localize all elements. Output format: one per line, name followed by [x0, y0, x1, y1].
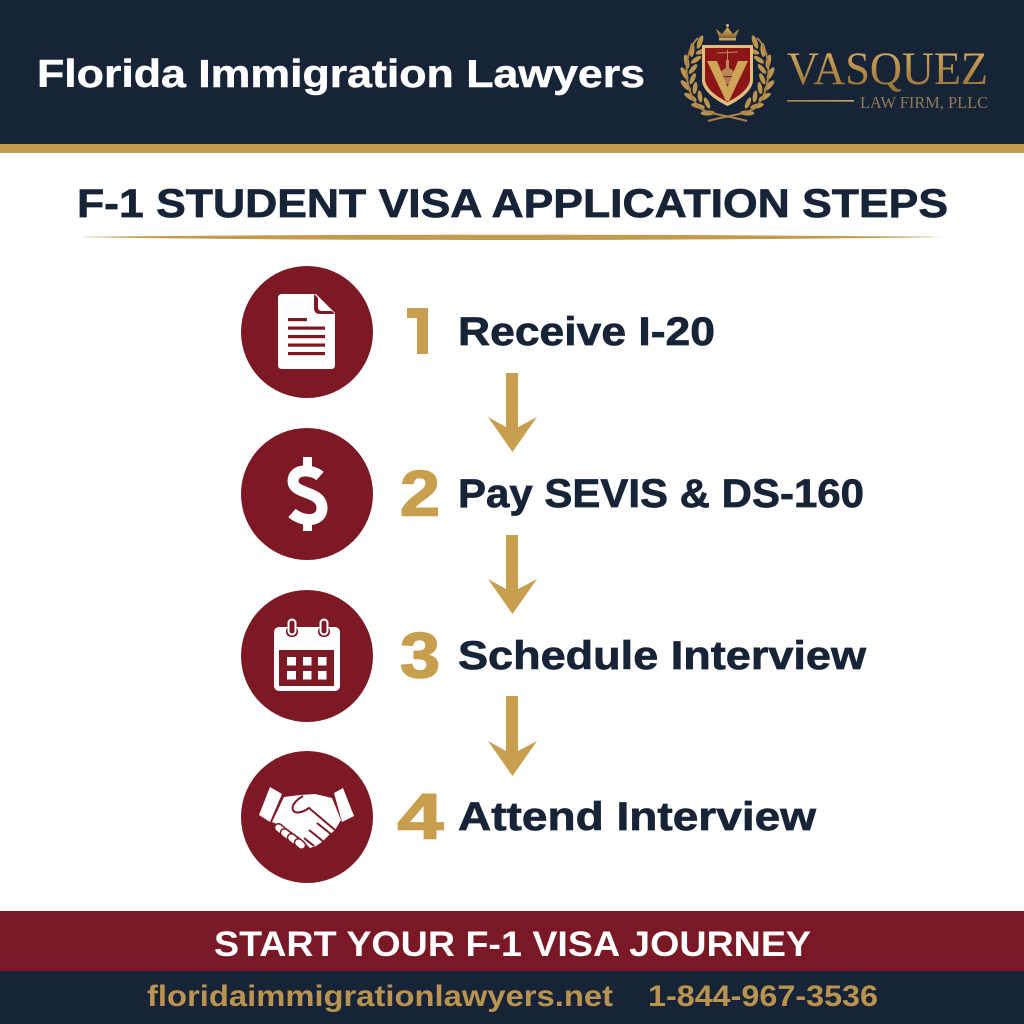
logo: Vasquez Law Firm [679, 24, 988, 121]
step label 3: Schedule Interview [458, 634, 867, 678]
arrow 2 to 3 [488, 535, 537, 614]
step 3 [241, 590, 867, 722]
icon: calendar [241, 590, 373, 722]
step number 3: 3 [400, 620, 440, 692]
footer band [0, 971, 1024, 1024]
call to action text: START YOUR F-1 VISA JOURNEY [214, 925, 811, 964]
icon: dollar sign [241, 428, 373, 560]
heading underline [80, 235, 942, 240]
logo subtitle: LAW FIRM, PLLC [860, 93, 988, 112]
step number 2: 2 [400, 458, 440, 530]
step number 4: 4 [398, 780, 444, 852]
step number 1: 1 [400, 296, 438, 368]
step 1 [241, 266, 715, 398]
icon: document [241, 266, 373, 398]
step label 1: Receive I-20 [458, 310, 715, 354]
step label 2: Pay SEVIS & DS-160 [458, 472, 864, 516]
logo wordmark: VASQUEZ [787, 43, 988, 95]
icon: laurel wreath [679, 35, 776, 121]
arrow 1 to 2 [488, 373, 537, 452]
step number 1 [407, 308, 428, 354]
arrow 3 to 4 [488, 696, 537, 776]
icon: handshake [241, 751, 373, 883]
step 2 [241, 428, 864, 560]
step label 4: Attend Interview [458, 795, 817, 839]
header band [0, 0, 1024, 153]
call to action band [0, 911, 1024, 971]
header title: Florida Immigration Lawyers [37, 53, 645, 96]
phone number: 1-844-967-3536 [648, 980, 878, 1013]
logo rule [787, 100, 854, 102]
website: floridaimmigrationlawyers.net [147, 980, 613, 1013]
icon: crown [716, 24, 739, 40]
icon: shield [702, 45, 753, 106]
main heading: F-1 STUDENT VISA APPLICATION STEPS [77, 182, 948, 226]
step 4 [241, 751, 817, 883]
